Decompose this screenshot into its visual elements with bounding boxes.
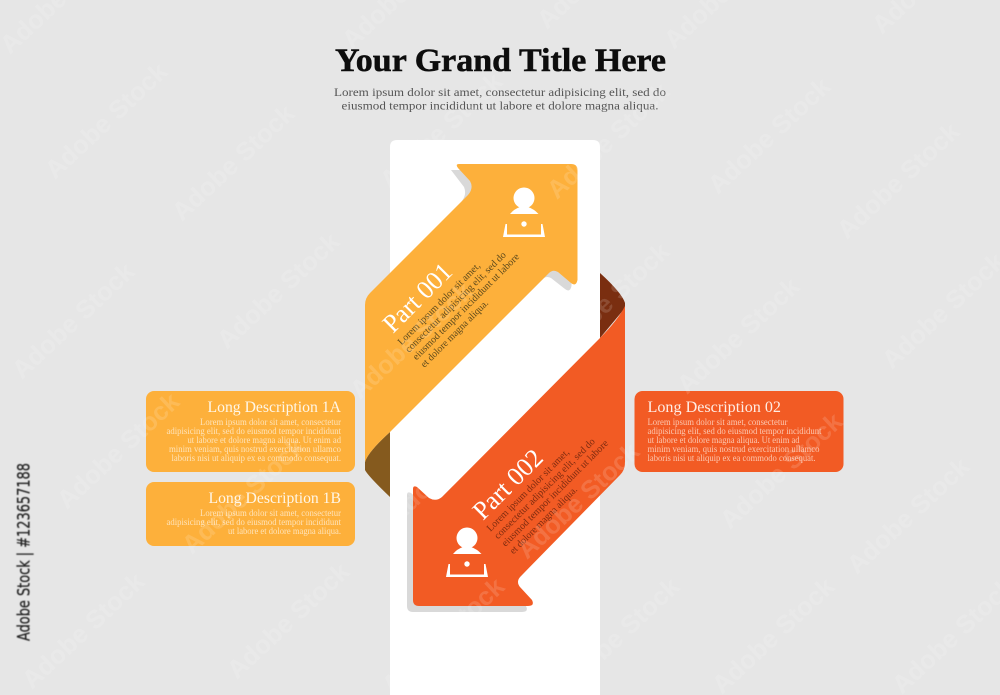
body text: 02: minim veniam, quis nostrud exercitation ullamco [648,444,820,454]
body text: 02: laboris nisi ut aliquip ex ea commodo consequat. [648,453,816,463]
body text: 02 [648,417,822,463]
description: Part 001: consectetur adipisicing elit, sed do [403,250,509,355]
watermark pattern: Adobe Stock [832,117,966,244]
watermark pattern: Adobe Stock [542,237,676,364]
arrow: part 002 [413,306,625,606]
description: Part 002: et dolore magna aliqua. [508,484,580,557]
description: Part 002: eiusmod tempor incididunt ut labore [500,438,611,549]
description: Part 001: et dolore magna aliqua. [419,298,491,370]
body text: 1A: Lorem ipsum dolor sit amet, consectetur [200,417,341,427]
title: Your Grand Title Here [335,43,666,79]
description: Part 001: Lorem ipsum dolor sit amet, [396,261,483,348]
yellow arrow body [365,164,578,462]
watermark pattern: Adobe Stock [715,407,849,534]
panel: Long Description 1B [146,482,355,546]
watermark pattern: Adobe Stock [222,557,356,684]
watermark pattern: Adobe Stock [177,432,311,559]
watermark pattern: Adobe Stock [345,277,479,404]
heading: Part 002: Part 002 [467,443,549,525]
white vertical strip [390,140,600,695]
fold: orange ribbon underside [600,273,625,338]
subtitle text: Lorem ipsum dolor sit amet, consectetur adipisicing elit, sed do [334,85,666,99]
watermark pattern: Adobe Stock [842,452,976,579]
watermark pattern: Adobe Stock [512,437,646,564]
body text: 1A: laboris nisi ut aliquip ex ea commodo consequat. [172,453,341,463]
watermark pattern: Adobe Stock [167,99,301,226]
orange arrow body [413,306,625,606]
watermark pattern: Adobe Stock [17,567,151,694]
panel: Long Description 1A [146,391,355,472]
watermark pattern: Adobe Stock [382,402,516,529]
body text: 02: adipisicing elit, sed do eiusmod tempor incididunt [648,426,822,436]
watermark pattern: Adobe Stock [542,77,676,204]
subtitle text [334,85,666,112]
fold: yellow ribbon underside [365,432,390,497]
description: Part 001: eiusmod tempor incididunt ut labore [411,251,522,363]
body text: 1A: minim veniam, quis nostrud exercitation ullamco [169,444,341,454]
description: Part 002: consectetur adipisicing elit, sed do [492,436,598,542]
body text: 1B: adipisicing elit, sed do eiusmod tempor incididunt [166,517,341,527]
body text: 02: ut labore et dolore magna aliqua. Ut enim ad [648,435,800,445]
body text: 1A: adipisicing elit, sed do eiusmod tempor incididunt [166,426,341,436]
watermark pattern: Adobe Stock [52,387,186,514]
icon: person with laptop [446,528,488,577]
watermark pattern: Adobe Stock [703,72,837,199]
body text: 1B: Lorem ipsum dolor sit amet, consectetur [200,508,341,518]
heading: 1A: Long Description 1A [208,399,341,416]
watermark pattern: Adobe Stock [672,272,806,399]
heading: 1B: Long Description 1B [208,490,341,507]
body text: 1A [166,417,341,463]
watermark pattern: Adobe Stock [7,257,141,384]
body text: 1A: ut labore et dolore magna aliqua. Ut enim ad [188,435,341,445]
watermark pattern: Adobe Stock [375,67,509,194]
panel: Long Description 02 [634,391,844,472]
heading: 02: Long Description 02 [648,399,781,416]
icon: person with laptop [503,188,545,237]
body text: 1B [166,508,341,536]
description: Part 002: Lorem ipsum dolor sit amet, [485,447,572,534]
body text: 1B: ut labore et dolore magna aliqua. [228,526,341,536]
stock id label: Adobe Stock | #123657188 [14,463,34,641]
arrow shadow: part 002 [407,486,527,612]
watermark pattern: Adobe Stock [212,227,346,354]
subtitle text: eiusmod tempor incididunt ut labore et dolore magna aliqua. [342,98,658,112]
arrow: part 001 [365,164,578,462]
arrow shadow: part 001 [451,170,572,306]
heading: Part 001: Part 001 [377,257,458,338]
body text: 02: Lorem ipsum dolor sit amet, consectetur [648,417,788,427]
watermark pattern: Adobe Stock [40,57,174,184]
